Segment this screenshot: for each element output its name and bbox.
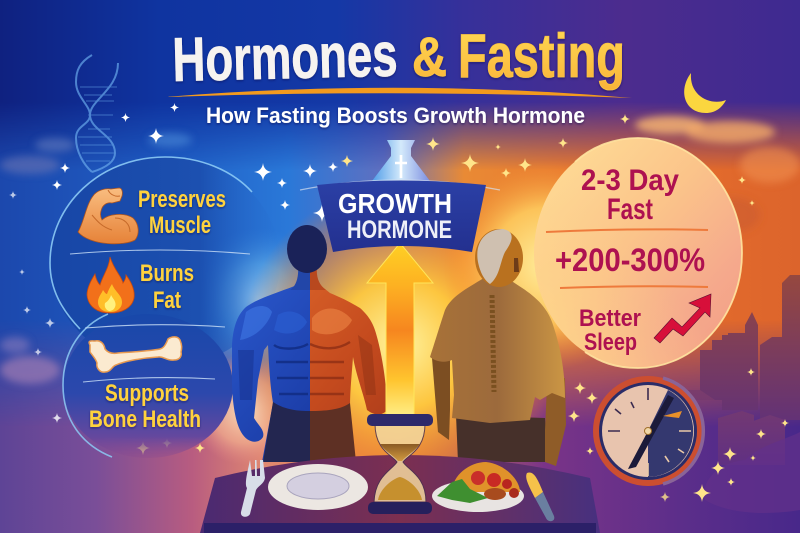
arms xyxy=(432,352,450,440)
text: fast duration xyxy=(581,164,679,226)
text: better sleep xyxy=(579,305,641,356)
icon: flame xyxy=(87,257,134,313)
icon: red rising arrow xyxy=(654,294,711,343)
icon: hourglass xyxy=(367,414,433,514)
text: fast duration: 2-3 Day xyxy=(581,164,679,197)
table top xyxy=(200,455,600,533)
text: burns fat: Burns xyxy=(140,260,194,287)
icon: flexed arm xyxy=(78,188,138,244)
decorative stars xyxy=(9,103,755,455)
icon: DNA helix xyxy=(76,55,118,172)
icon: knife xyxy=(526,472,554,521)
icon: flask xyxy=(372,140,430,181)
body orange half xyxy=(310,288,386,414)
text: supports bone health: Bone Health xyxy=(89,406,201,433)
head xyxy=(287,225,327,290)
moon crescent xyxy=(684,73,726,113)
text: preserves muscle xyxy=(138,186,226,239)
houses xyxy=(680,390,785,470)
icon: clock xyxy=(593,376,703,486)
trousers xyxy=(456,415,548,462)
panel: right stats circle xyxy=(534,138,742,368)
icon: bone xyxy=(89,337,182,372)
text: fast duration: Fast xyxy=(607,193,653,226)
decorative stars over city xyxy=(660,368,789,502)
title: Fasting xyxy=(458,22,625,91)
banner: growth hormone: HORMONE xyxy=(347,216,452,244)
title underline xyxy=(165,88,632,98)
text: preserves muscle: Preserves xyxy=(138,186,226,213)
text: supports bone health: Supports xyxy=(105,380,189,407)
figure: split muscular man xyxy=(232,225,387,462)
trees xyxy=(704,432,800,513)
distant towers xyxy=(700,275,800,420)
banner: growth hormone xyxy=(300,180,500,252)
table edge xyxy=(204,523,596,533)
clouds xyxy=(0,116,800,384)
dividers xyxy=(70,250,250,382)
trousers: blue side xyxy=(263,402,310,462)
figure: older man xyxy=(430,229,566,466)
panel: left benefits xyxy=(50,157,280,458)
title: & xyxy=(412,25,447,88)
text: supports bone health xyxy=(89,380,201,433)
city skyline xyxy=(680,275,800,513)
text: preserves muscle: Muscle xyxy=(149,212,211,239)
icon: fork xyxy=(241,460,265,517)
subtitle: How Fasting Boosts Growth Hormone xyxy=(206,103,585,128)
panel: lower benefits circle xyxy=(63,314,233,458)
text: burns fat: Fat xyxy=(153,287,181,314)
shirt xyxy=(430,276,565,423)
text: better sleep: Better xyxy=(579,305,641,332)
head xyxy=(475,229,523,287)
body blue half xyxy=(232,286,310,462)
icon: food plate xyxy=(432,462,524,512)
text: growth hormone increase: +200-300% xyxy=(555,242,705,278)
title: Hormones xyxy=(172,21,398,95)
trousers: orange side xyxy=(310,403,356,462)
title xyxy=(172,21,625,95)
text: better sleep: Sleep xyxy=(584,329,637,356)
panel: upper benefits circle xyxy=(50,157,280,367)
banner: growth hormone: GROWTH xyxy=(338,188,452,219)
table with place setting xyxy=(200,414,600,533)
text: burns fat xyxy=(140,260,194,314)
arrow: growth rising xyxy=(367,243,433,418)
dividers xyxy=(546,229,708,288)
icon: empty plate xyxy=(268,464,368,510)
